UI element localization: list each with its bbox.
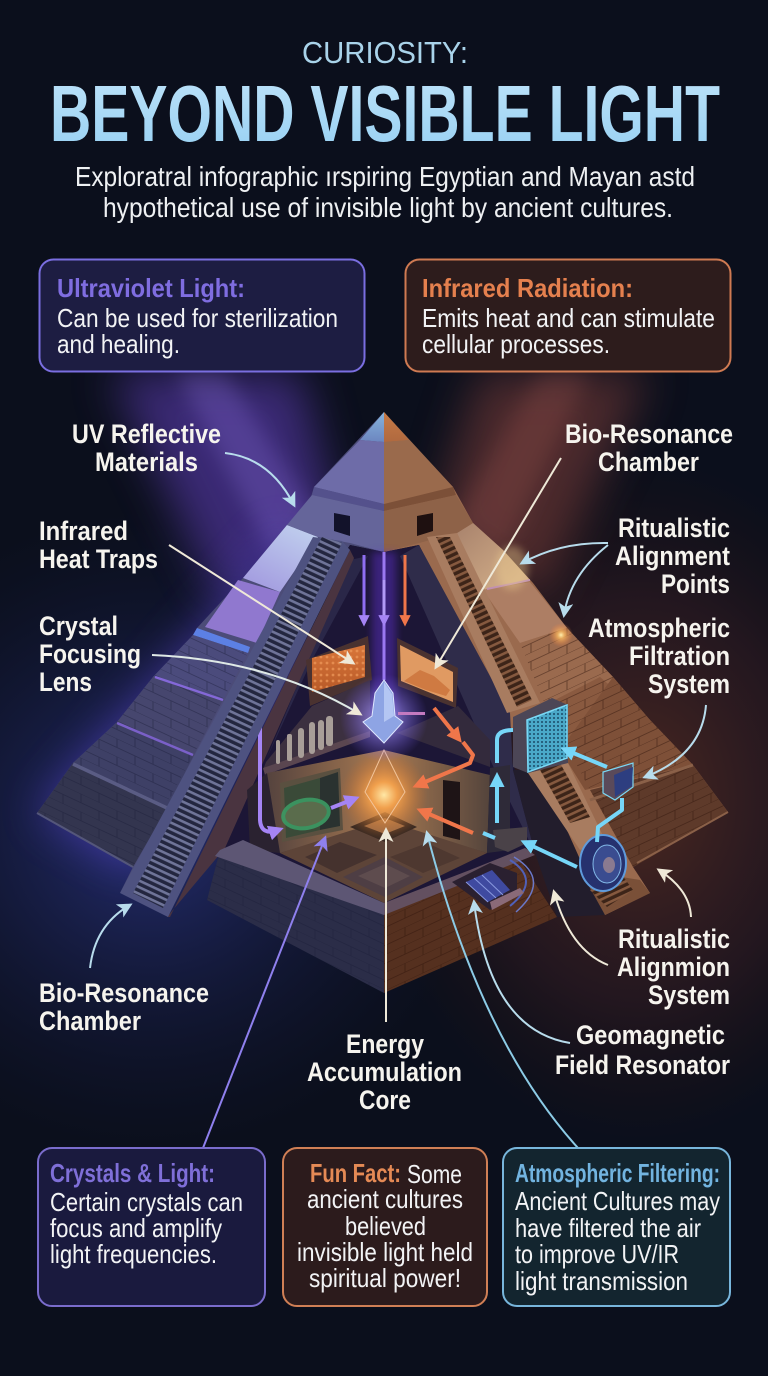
subtitle: hypothetical use of invisible light by ancient cultures. [103,192,673,223]
panel: atmospheric filtering: have filtered the air [515,1213,701,1243]
beam arrows [364,552,405,680]
left face [37,412,384,893]
panel: crystals and light [38,1148,265,1306]
label: Atmospheric Filtration System: Atmospheric [588,613,730,643]
focusing crystal [340,674,428,762]
chamber floor [280,820,487,903]
label: Infrared Heat Traps: Heat Traps [39,544,158,574]
label: Ritualistic Alignmion System [554,870,730,1010]
right face [384,412,728,915]
label: Atmospheric Filtration System: System [648,669,730,699]
light beams [37,372,650,867]
capstone [287,412,473,552]
label: Atmospheric Filtration System: Filtration [629,641,730,671]
label: Geomagnetic Field Resonator [474,902,730,1080]
panel: fun fact: invisible light held [297,1237,473,1267]
label: Energy Accumulation Core [307,830,462,1115]
label: Energy Accumulation Core: Core [359,1085,411,1115]
panel: infrared radiation: Emits heat and can stimulate [422,303,715,333]
geomagnetic field resonator [452,857,534,912]
heat trap panels [306,636,458,708]
label: Ritualistic Alignmion System: Alignmion [617,952,730,982]
label: Bio-Resonance Chamber (top) [436,419,733,667]
front walls [207,840,557,993]
label: Ritualistic Alignmion System: Ritualistic [618,924,730,954]
label: Bio-Resonance Chamber (top): Chamber [598,447,699,477]
panel: atmospheric filtering: Ancient Cultures may [515,1186,720,1216]
bio-resonance window [279,768,343,842]
panel: atmospheric filtering [503,1148,730,1306]
lower chamber walls [247,750,510,853]
orange energy arrows [418,708,473,833]
purple energy arrows [256,716,354,832]
atmospheric filtration system [493,698,633,891]
label: Infrared Heat Traps [39,516,353,663]
label: Bio-Resonance Chamber (top): Bio-Resonance [565,419,733,449]
label: Crystal Focusing Lens: Lens [39,667,92,697]
label: UV Reflective Materials: Materials [95,447,198,477]
title block [50,35,720,223]
label: Ritualistic Alignment Points: Alignment [615,541,730,571]
label: Energy Accumulation Core: Accumulation [307,1057,462,1087]
label: Ritualistic Alignmion System: System [648,980,730,1010]
label: UV Reflective Materials [72,419,294,505]
panel: atmospheric filtering: to improve UV/IR [515,1239,679,1269]
energy core [340,750,428,842]
panel: infrared radiation [406,260,730,372]
label: Energy Accumulation Core: Energy [346,1029,424,1059]
label: Bio-Resonance Chamber (bottom): Bio-Resonance [39,978,209,1008]
panel: atmospheric filtering: light transmission [515,1266,688,1296]
interior shaft [167,545,605,917]
panel: fun fact [283,1148,487,1306]
eyebrow: CURIOSITY: [302,35,468,70]
panel: fun fact: ancient cultures [307,1184,463,1214]
connector: crystals callout [203,838,325,1148]
label: Crystal Focusing Lens: Focusing [39,639,141,669]
cyan air arrows [483,730,622,867]
label: Bio-Resonance Chamber (bottom) [39,905,209,1036]
panel: ultraviolet light: Can be used for sterilization [57,303,338,333]
left stairway [120,537,350,917]
label: Crystal Focusing Lens [39,611,360,714]
panel: crystals and light: light frequencies. [50,1239,217,1269]
panel: fun fact: Some [407,1159,462,1189]
label: Ritualistic Alignment Points: Points [661,569,730,599]
label: Geomagnetic Field Resonator: Field Resonator [555,1050,730,1080]
label: Atmospheric Filtration System [588,613,730,777]
label: Crystal Focusing Lens: Crystal [39,611,118,641]
panel: ultraviolet light: and healing. [57,329,180,359]
panel: ultraviolet light [40,260,364,372]
left shelves with statues [263,680,490,775]
label: Geomagnetic Field Resonator: Geomagnetic [576,1020,725,1050]
panel: crystals and light: focus and amplify [50,1213,222,1243]
label: Infrared Heat Traps: Infrared [39,516,128,546]
panel: crystals and light: Certain crystals can [50,1187,243,1217]
label: Ritualistic Alignment Points [522,513,730,615]
panel: infrared radiation: cellular processes. [422,329,610,359]
label: Ritualistic Alignment Points: Ritualistic [618,513,730,543]
pyramid illustration [37,412,728,993]
right stairway [427,533,650,915]
subtitle: Exploratral infographic ırspiring Egyptian and Mayan astd [75,161,695,192]
panel: infrared radiation: Infrared Radiation: [422,273,633,303]
label: UV Reflective Materials: UV Reflective [72,419,221,449]
panel: ultraviolet light: Ultraviolet Light: [57,273,245,303]
panel: crystals and light: Crystals & Light: [50,1158,215,1188]
subtitle [75,161,695,223]
label: Bio-Resonance Chamber (bottom): Chamber [39,1006,141,1036]
panel: fun fact: believed [345,1211,426,1241]
panel: fun fact: Fun Fact: [310,1158,401,1188]
connector: atmospheric callout [427,833,578,1148]
panel: fun fact: spiritual power! [309,1263,461,1293]
